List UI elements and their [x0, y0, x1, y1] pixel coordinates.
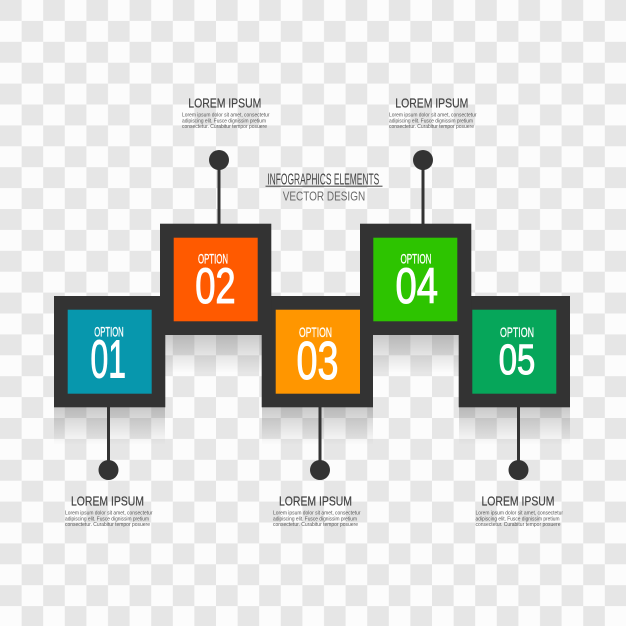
text block: option 04: LOREM IPSUM	[395, 96, 468, 110]
text block: option 01: adipiscing elit. Fusce dignissim pretium	[65, 516, 149, 522]
box: option 01	[54, 296, 165, 407]
text block: option 04: Lorem ipsum dolor sit amet, consectetur	[389, 112, 477, 118]
text block: option 03: consectetur. Curabitur tempor posuere	[273, 522, 358, 528]
title: INFOGRAPHICS ELEMENTS	[267, 171, 379, 188]
box: option 01: OPTION	[94, 324, 124, 340]
box: option 01: 01	[90, 330, 126, 390]
text block: option 01	[65, 494, 153, 528]
box: option 05	[459, 296, 570, 407]
text block: option 03: LOREM IPSUM	[279, 494, 352, 508]
connector: option 05 pin	[508, 407, 528, 480]
text block: option 05: consectetur. Curabitur tempor posuere	[476, 522, 560, 528]
text block: option 01: LOREM IPSUM	[71, 494, 144, 508]
connector: option 03 pin	[310, 407, 330, 480]
text block: option 04: consectetur. Curabitur tempor posuere	[389, 124, 474, 130]
box: option 04: OPTION	[400, 250, 432, 266]
box: option 02: OPTION	[198, 250, 228, 266]
text block: option 05	[476, 494, 563, 528]
text block: option 01: consectetur. Curabitur tempor posuere	[65, 522, 150, 528]
text block: option 01: Lorem ipsum dolor sit amet, consectetur	[65, 510, 153, 516]
box: option 05: OPTION	[500, 324, 534, 340]
connector: option 04 pin	[413, 150, 433, 224]
text block: option 03: adipiscing elit. Fusce dignissim pretium	[273, 516, 357, 522]
connector: option 01 pin	[98, 407, 118, 480]
box: option 02	[160, 224, 271, 335]
text block: option 04	[389, 96, 477, 130]
text block: option 05: LOREM IPSUM	[482, 494, 554, 508]
text block: option 02: adipiscing elit. Fusce dignissim pretium	[182, 118, 266, 124]
text block: option 02	[182, 96, 270, 130]
box: option 02: 02	[195, 258, 236, 314]
title	[266, 171, 382, 204]
text block: option 03	[273, 494, 361, 528]
text block: option 05: adipiscing elit. Fusce dignissim pretium	[476, 516, 560, 522]
connector: option 02 pin	[209, 150, 229, 224]
title: VECTOR DESIGN	[283, 190, 365, 204]
text block: option 04: adipiscing elit. Fusce dignissim pretium	[389, 118, 473, 124]
text block: option 05: Lorem ipsum dolor sit amet, consectetur	[476, 510, 563, 516]
box: option 04	[360, 224, 471, 335]
box: option 05: 05	[499, 336, 535, 384]
box: option 03: 03	[296, 331, 338, 391]
drop shadows under boxes	[54, 335, 570, 445]
box: option 03: OPTION	[299, 324, 332, 340]
box: option 04: 04	[396, 258, 438, 314]
text block: option 02: Lorem ipsum dolor sit amet, consectetur	[182, 112, 270, 118]
text block: option 02: LOREM IPSUM	[188, 96, 261, 110]
text block: option 03: Lorem ipsum dolor sit amet, consectetur	[273, 510, 361, 516]
text block: option 02: consectetur. Curabitur tempor posuere	[182, 124, 267, 130]
box: option 03	[262, 296, 373, 407]
